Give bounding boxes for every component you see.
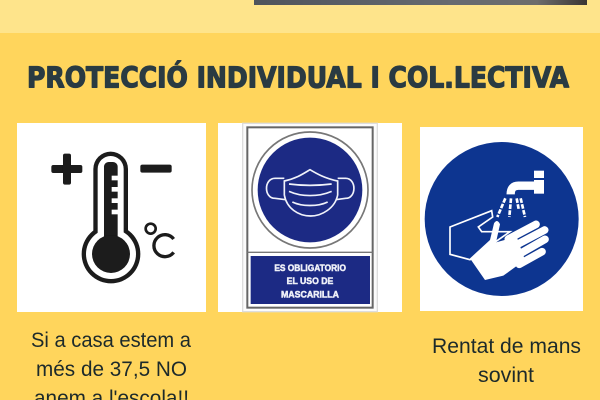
icon: thermometer: [51, 152, 174, 283]
panel: thermometer card: [17, 123, 206, 312]
caption: handwashing: sovint: [478, 364, 534, 387]
panel: mask sign card: [218, 123, 402, 312]
caption: temperature: Si a casa estem a: [31, 329, 191, 352]
back hand: [450, 211, 510, 260]
sign text: [274, 263, 346, 299]
sign text: ES OBLIGATORIO: [274, 263, 346, 273]
sign text: EL USO DE: [287, 276, 333, 286]
water drops: [497, 198, 525, 217]
icon: handwashing sign: [425, 142, 579, 296]
panel: handwashing card: [420, 127, 583, 311]
faucet: [511, 171, 544, 194]
caption: handwashing: [432, 335, 581, 387]
caption: temperature: [31, 329, 191, 400]
cropped photo strip: [254, 0, 587, 5]
caption: handwashing: Rentat de mans: [432, 335, 581, 358]
sign text: MASCARILLA: [281, 289, 339, 299]
icon: mask sign: [243, 123, 377, 312]
front hand: [470, 221, 545, 280]
top light band: [0, 0, 600, 33]
caption: temperature: més de 37,5 NO: [36, 358, 187, 381]
